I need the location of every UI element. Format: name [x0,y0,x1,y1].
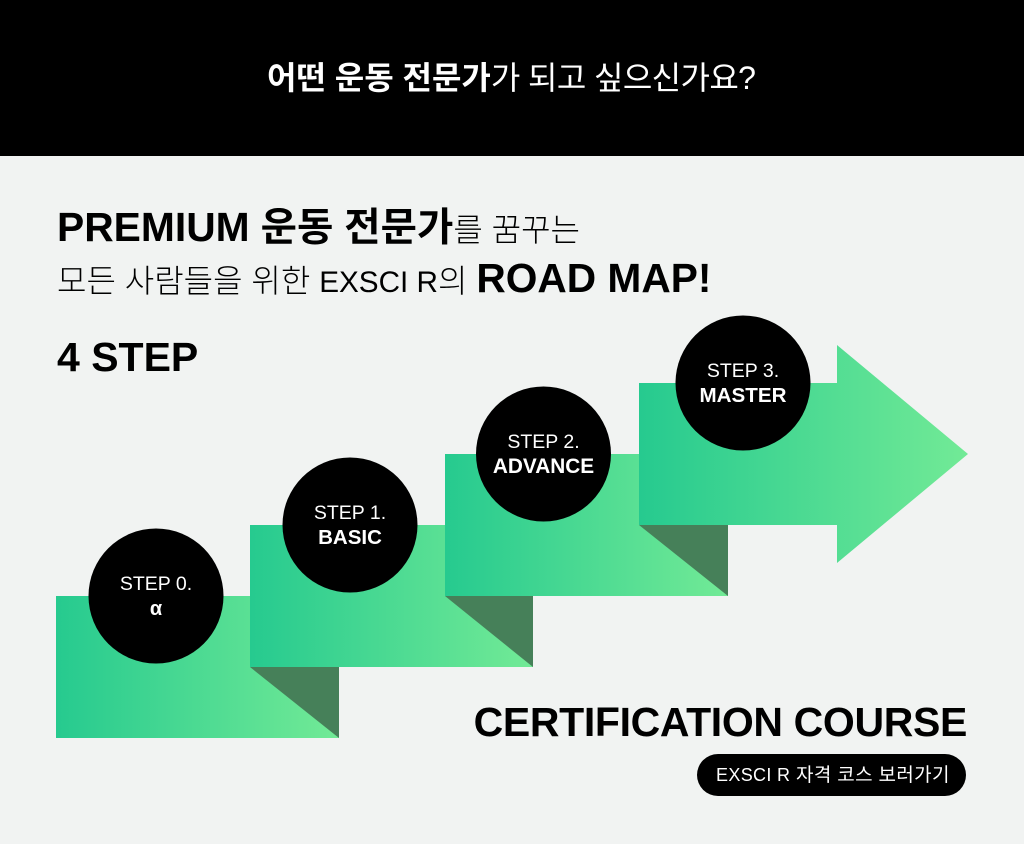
certification course title: CERTIFICATION COURSE [474,699,967,745]
step 1 circle [282,458,418,592]
step 0 circle: α [150,598,163,620]
step 1 circle: STEP 1. [314,502,386,524]
step 2 block [445,454,728,596]
step 2 circle: ADVANCE [493,455,594,478]
course link button: EXSCI R 자격 코스 보러가기 [716,765,950,786]
step 0 fold [250,667,339,738]
header title: 어떤 운동 전문가가 되고 싶으신가요? [267,60,755,96]
step 3 circle: STEP 3. [707,360,779,382]
step 2 circle [476,386,611,522]
step 1 block [250,525,533,667]
heading line 2: 모든 사람들을 위한 EXSCI R의 ROAD MAP! [57,255,711,301]
header banner [0,0,1024,156]
step 2 fold [639,525,728,596]
4 step label: 4 STEP [57,334,198,380]
step 3 circle: MASTER [700,384,787,407]
step 0 block [56,596,339,738]
step 3 circle [676,316,810,450]
final arrow [639,345,968,563]
step 0 circle: STEP 0. [120,573,192,595]
step 2 circle: STEP 2. [507,431,580,453]
step 1 circle: BASIC [318,526,382,549]
course link button [697,754,966,796]
step 0 circle [88,528,224,664]
heading line 1: PREMIUM 운동 전문가를 꿈꾸는 [57,204,580,250]
step 1 fold [445,596,533,667]
